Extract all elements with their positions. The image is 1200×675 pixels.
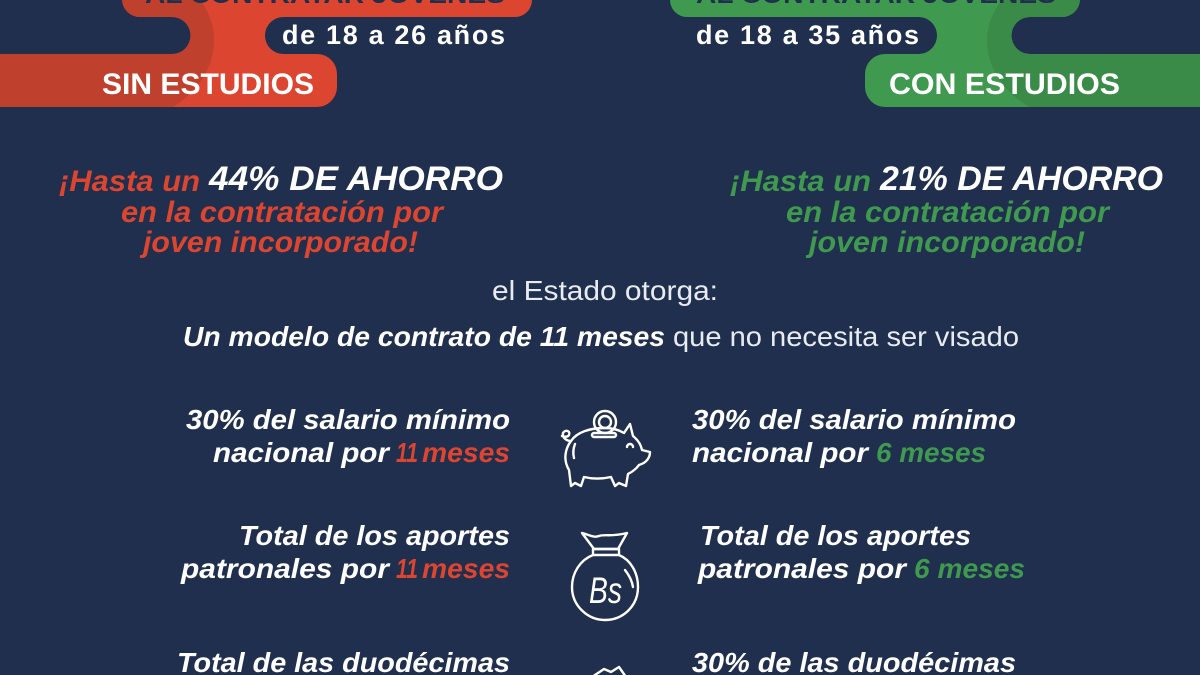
benefit row 2 left: 11: [396, 553, 418, 584]
savings callout: 44%: ¡Hasta un: [59, 165, 200, 198]
icon: money bag: Bs: [589, 570, 622, 611]
benefit row 2 right: Total de los aportes: [700, 520, 971, 551]
savings callout: 21%: ¡Hasta un: [730, 165, 871, 198]
savings callout: 21%: [730, 160, 1163, 259]
benefit row 2 left: [180, 520, 510, 584]
age range: de 18 a 35 años: [696, 20, 919, 50]
age range: de 18 a 26 años: [282, 20, 505, 50]
contract statement: Un modelo de contrato de 11 meses: [183, 321, 665, 352]
savings callout: 44%: 44% DE AHORRO: [208, 160, 503, 198]
benefit row 1 left: [186, 404, 510, 468]
benefit row 1 right: 30% del salario mínimo: [692, 404, 1016, 435]
benefit row 2 left: meses: [422, 553, 510, 584]
savings callout: 44%: en la contratación por: [121, 196, 445, 229]
savings callout: 21%: 21% DE AHORRO: [879, 160, 1163, 198]
savings callout: 21%: en la contratación por: [786, 196, 1111, 229]
benefit row 2 left: patronales por: [180, 553, 391, 584]
panel: sin estudios banner: [0, 0, 532, 107]
benefit row 2 right: 6 meses: [914, 553, 1025, 584]
benefit row 1 right: [692, 404, 1016, 468]
category label: SIN ESTUDIOS: [102, 68, 314, 101]
icon: money bag: [572, 533, 638, 620]
savings callout: 44%: [59, 160, 503, 259]
red banner shape: [0, 0, 532, 107]
savings callout: 44%: joven incorporado!: [139, 226, 418, 259]
benefit row 2 right: [697, 520, 1025, 584]
icon: piggy bank: [562, 411, 650, 486]
benefit row 2 left: Total de los aportes: [239, 520, 510, 551]
benefit row 1 right: nacional por: [692, 437, 870, 468]
benefit row 1 left: nacional por: [213, 437, 391, 468]
benefit row 2 right: patronales por: [697, 553, 908, 584]
benefit row 1 left: 30% del salario mínimo: [186, 404, 510, 435]
category label: CON ESTUDIOS: [889, 68, 1120, 101]
subheading: el Estado otorga:: [492, 275, 718, 306]
benefit row 1 right: 6 meses: [876, 437, 986, 468]
savings callout: 21%: joven incorporado!: [805, 226, 1085, 259]
panel: con estudios banner: [670, 0, 1200, 107]
contract statement: [183, 321, 1019, 352]
contract statement: que no necesita ser visado: [673, 321, 1019, 352]
benefit row 1 left: 11: [396, 437, 418, 468]
benefit row 1 left: meses: [422, 437, 510, 468]
green banner shape: [670, 0, 1200, 107]
icon: money bills: [592, 667, 626, 675]
